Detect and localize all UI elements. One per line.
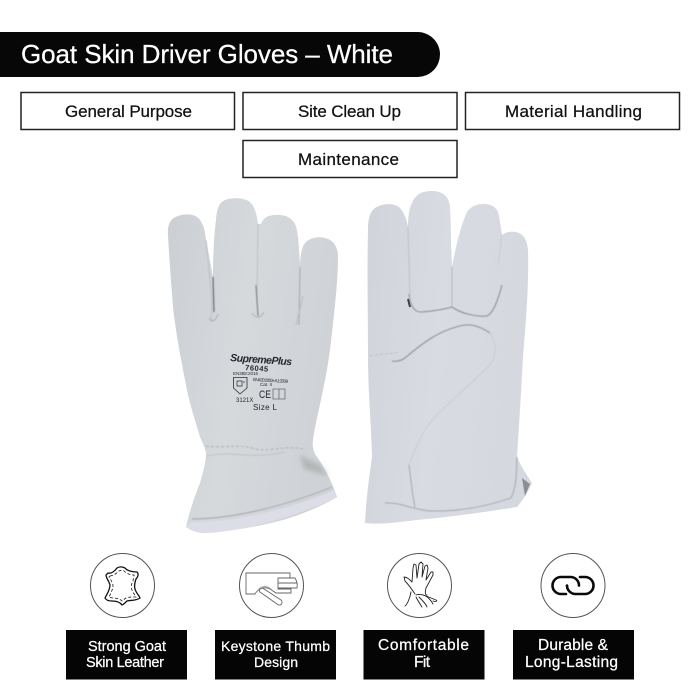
tag: General Purpose: General Purpose <box>65 102 192 121</box>
feature label: Strong Goat Skin Leather <box>66 630 187 680</box>
glove label print: EN388:2016 <box>233 371 259 376</box>
glove label print: CE <box>259 389 271 401</box>
feature label: Keystone Thumb Design: Design <box>254 654 298 670</box>
glove label print <box>230 352 293 412</box>
seams and finger slits <box>192 224 332 519</box>
feature label: Durable & Long-Lasting: Long-Lasting <box>525 654 618 671</box>
tag: Maintenance: Maintenance <box>298 150 399 169</box>
feature label: Durable & Long-Lasting: Durable & <box>538 637 609 654</box>
glove label print: SupremePlus <box>230 352 293 368</box>
feature label: Keystone Thumb Design: Keystone Thumb <box>221 638 330 654</box>
feature label: Comfortable Fit: Comfortable <box>378 637 469 654</box>
glove label print: Size L <box>253 403 278 412</box>
feature label: Keystone Thumb Design <box>215 630 336 680</box>
tag: Material Handling: Material Handling <box>505 102 642 121</box>
tag: Material Handling <box>466 92 680 130</box>
tag: Site Clean Up <box>243 92 457 130</box>
tag: General Purpose <box>21 92 234 130</box>
title banner: Goat Skin Driver Gloves – White <box>21 39 393 69</box>
feature label: Strong Goat Skin Leather: Skin Leather <box>86 655 164 671</box>
feature label: Strong Goat Skin Leather: Strong Goat <box>88 639 166 655</box>
icon: hand at wrist <box>388 554 452 618</box>
glove: back of hand with label <box>168 198 338 533</box>
glove: palm side <box>365 191 532 524</box>
feature label: Comfortable Fit: Fit <box>414 654 431 671</box>
palm seams <box>370 227 517 511</box>
glove label print: 3121X <box>236 398 253 404</box>
glove label print: EN420:2003+A1:2009 <box>253 377 289 384</box>
tag: Site Clean Up: Site Clean Up <box>298 102 401 121</box>
icon: chain link <box>541 554 605 618</box>
tag: Maintenance <box>243 140 457 178</box>
title banner <box>0 32 440 77</box>
feature label: Comfortable Fit <box>364 630 484 680</box>
feature label: Durable & Long-Lasting <box>513 630 634 680</box>
icon: leather hide <box>90 554 154 618</box>
glove label print: 76045 <box>245 363 268 374</box>
glove label print: Cat. II <box>260 382 272 387</box>
icon: keystone thumb glove <box>240 554 304 618</box>
